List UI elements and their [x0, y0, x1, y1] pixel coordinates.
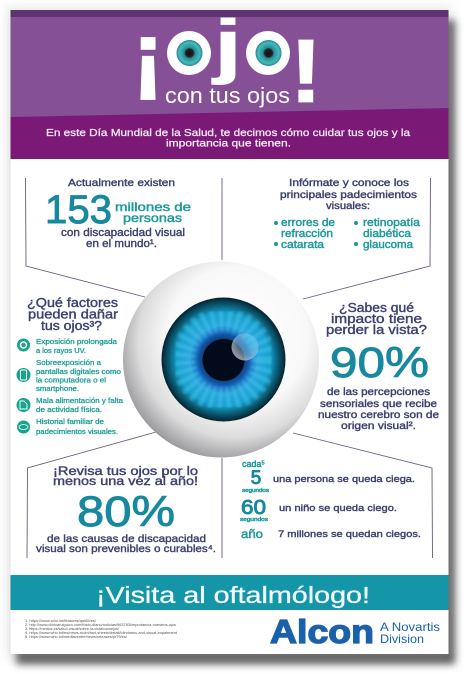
- panel: cada 5 segundos: una persona se queda ciega.: [273, 474, 415, 485]
- connector lines: [26, 178, 432, 558]
- panel: cada 5 segundos: segundos: [242, 488, 270, 494]
- panel: 153 millones: con discapacidad visual: [61, 227, 185, 239]
- panel: factores: [16, 296, 123, 436]
- title: ojo: j: [211, 6, 243, 86]
- factor: historial: Historial familiar de: [36, 419, 104, 426]
- panel: 80%: [36, 466, 216, 555]
- logo: Alcon: A Novartis: [380, 620, 440, 634]
- list: padecimientos: catarata: [281, 239, 325, 251]
- references: 4. https://www.who.int/es/news-room/fact-sheets/detail/blindness-and-visual-impairment: [25, 631, 177, 635]
- factor: UV: Exposición prolongada: [36, 339, 117, 346]
- logo: Alcon: Division: [380, 632, 424, 646]
- heading: factores: ¿Qué factores: [27, 296, 118, 310]
- icon: food: [16, 398, 30, 412]
- panel: 90%: [318, 301, 440, 432]
- factor: alimentación: [36, 398, 123, 414]
- panel: 153 millones: millones de: [115, 200, 191, 214]
- panel: 80%: 80%: [77, 488, 175, 536]
- title: ojo: [132, 4, 322, 122]
- factor: historial: padecimientos visuales.: [36, 429, 118, 436]
- factor: historial: [36, 419, 118, 436]
- factor: UV: a los rayos UV.: [36, 348, 86, 355]
- heading: factores: tus ojos³?: [41, 319, 102, 333]
- heading: factores: pueden dañar: [28, 308, 118, 322]
- panel: cada 5 segundos: 7 millones se quedan ciegos.: [278, 529, 421, 540]
- subtitle band: En este Día Mundial de la Salud, te decimos cómo cuidar tus ojos y la: [46, 127, 410, 139]
- panel: cada 5 segundos: [240, 459, 421, 541]
- title: ojo: o: [254, 28, 282, 80]
- title: con tus ojos: con tus ojos: [165, 83, 290, 108]
- title: ojo: o: [175, 28, 203, 80]
- panel: 90%: perder la vista?: [326, 323, 427, 337]
- panel: padecimientos visuales: visuales:: [326, 201, 370, 212]
- iris: [162, 298, 286, 422]
- pupil: [202, 339, 244, 381]
- list: padecimientos: errores de: [281, 217, 335, 229]
- subtitle band: importancia que tienen.: [166, 138, 291, 150]
- panel: 90%: nuestro cerebro son de: [318, 410, 440, 421]
- panel: cada 5 segundos: 5: [251, 468, 261, 489]
- list: padecimientos: diabética: [363, 228, 412, 240]
- panel: 153 millones: personas: [123, 211, 182, 225]
- references: 5. https://www.who.int/mediacentre/news/releases/pr79/es/: [25, 635, 127, 639]
- panel: padecimientos visuales: principales padecimientos: [280, 190, 417, 201]
- call to action band: [10, 575, 448, 610]
- logo: Alcon: [270, 613, 440, 650]
- call to action band: ¡Visita al oftalmólogo!: [96, 582, 370, 608]
- factor: UV: [36, 339, 117, 355]
- panel: 80%: visual son prevenibles o curables⁴.: [36, 543, 216, 555]
- logo: Alcon: Alcon: [270, 613, 374, 650]
- references: [25, 619, 177, 639]
- panel: 90%: impacto tiene: [331, 312, 422, 326]
- icon: smartphone: [16, 368, 30, 382]
- panel: cada 5 segundos: 60: [241, 497, 266, 519]
- list: padecimientos: refracción: [281, 228, 333, 240]
- title: ojo: ¡: [132, 4, 164, 105]
- panel: 153 millones: [45, 177, 191, 250]
- factor: pantallas: [36, 360, 121, 393]
- header panel: [10, 4, 448, 122]
- panel: 153 millones: 153: [45, 188, 112, 232]
- panel: 90%: ¿Sabes qué: [339, 301, 414, 315]
- icon: family eye: [17, 420, 30, 434]
- eyeball: [123, 262, 319, 458]
- highlight: [232, 334, 258, 360]
- panel: cada 5 segundos: año: [241, 529, 263, 541]
- list: padecimientos: retinopatía: [363, 217, 421, 229]
- factor: pantallas: pantallas digitales como: [36, 369, 121, 376]
- factor: pantallas: smartphone.: [36, 386, 79, 393]
- heading: factores: [27, 296, 118, 333]
- panel: 80%: ¡Revisa tus ojos por lo: [53, 466, 198, 478]
- panel: cada 5 segundos: segundos: [240, 517, 269, 523]
- references: 1. https://www.who.int/features/qa/65/es/: [25, 619, 96, 623]
- panel: 153 millones: en el mundo¹.: [86, 238, 157, 250]
- icon: sun: [17, 338, 30, 352]
- factor: alimentación: de actividad física.: [36, 407, 102, 414]
- panel: 90%: 90%: [330, 339, 429, 387]
- factor: pantallas: Sobreexposición a: [36, 360, 101, 367]
- panel: 153 millones: Actualmente existen: [68, 177, 175, 189]
- panel: cada 5 segundos: un niño se queda ciego.: [279, 503, 397, 514]
- list: padecimientos: [274, 217, 421, 251]
- panel: 90%: sensoriales que recibe: [320, 399, 438, 410]
- panel: 80%: de las causas de discapacidad: [47, 533, 206, 545]
- panel: padecimientos visuales: Infórmate y conoce los: [289, 178, 409, 189]
- references: 3. https://medics.es/salud-visual/sobre-la-vista/consejos/: [25, 627, 119, 631]
- subtitle band: [10, 108, 448, 159]
- list: padecimientos: glaucoma: [363, 239, 414, 251]
- title: ojo: !: [290, 21, 322, 122]
- factor: pantallas: la computadora o el: [36, 378, 107, 384]
- panel: 90%: origen visual².: [341, 421, 416, 432]
- panel: 80%: menos una vez al año!: [53, 476, 198, 488]
- panel: cada 5 segundos: cada⁵: [242, 459, 265, 470]
- factor: alimentación: Mala alimentación y falta: [36, 398, 123, 405]
- panel: 90%: de las percepciones: [327, 387, 430, 398]
- references: 2. http://www.clinicaruiguico.com/fosto-diario/noticias/963783/importancia-nuestros-ojos: [25, 623, 176, 627]
- panel: padecimientos visuales: [274, 178, 421, 251]
